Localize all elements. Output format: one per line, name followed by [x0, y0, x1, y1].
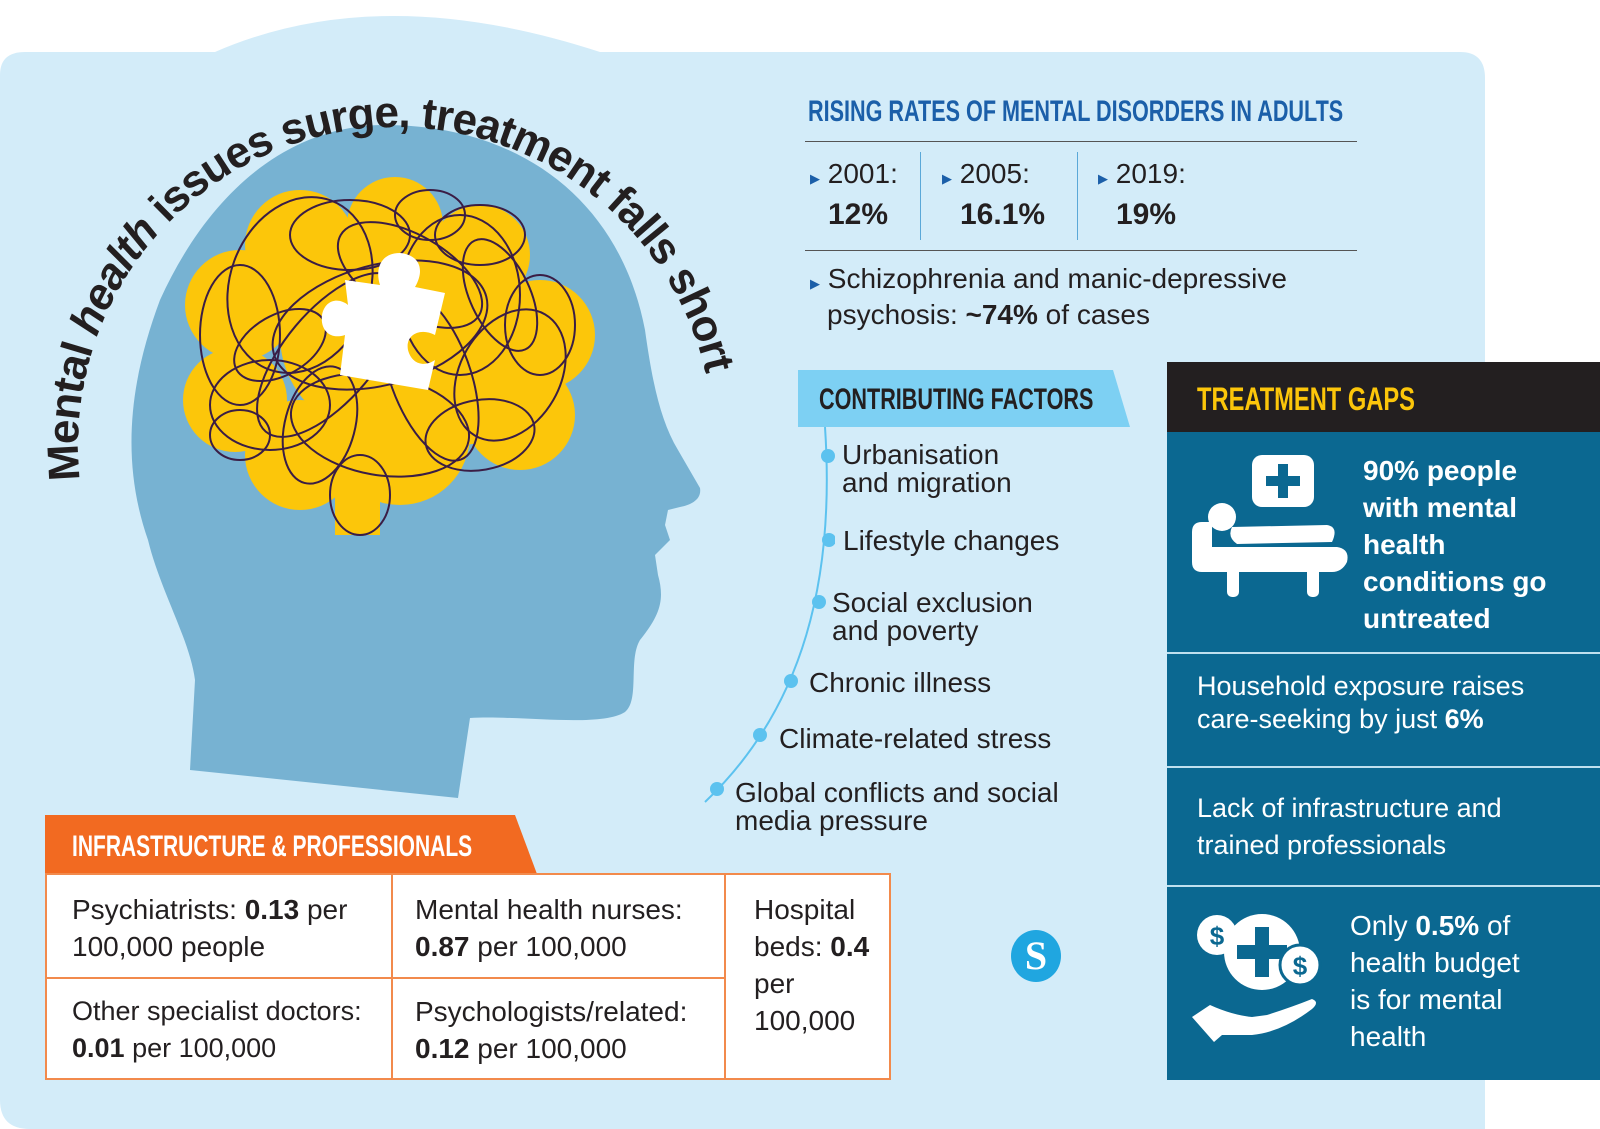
cell hospital beds: Hospital: [754, 894, 855, 925]
stat 2005: [942, 158, 1045, 231]
icon: money hand: [1192, 914, 1318, 1042]
factors list with curve: [704, 427, 1059, 836]
cell hospital beds: 100,000: [754, 1005, 855, 1036]
cell psychologists: Psychologists/related:: [415, 996, 687, 1027]
logo: [1011, 930, 1061, 982]
cell other doctors: [72, 996, 362, 1063]
text: budget: is for mental: [1350, 984, 1502, 1015]
contributing factors header: [798, 370, 1130, 427]
text: 90% untreated: [1362, 455, 1547, 634]
stat 2001: [810, 158, 898, 231]
text: budget: Only 0.5% of: [1350, 910, 1510, 941]
text: household exposure: [1197, 671, 1524, 734]
text: budget: health budget: [1350, 947, 1520, 978]
text: budget: [1350, 910, 1520, 1052]
factor 6: media pressure: [735, 805, 928, 836]
factor 1: Urbanisation: [842, 439, 999, 470]
stat 2001: 12%: [828, 198, 888, 231]
stat 2019: 19%: [1116, 198, 1176, 231]
schizophrenia note: [810, 263, 1287, 330]
factor 3: Social exclusion: [832, 587, 1033, 618]
text: 90% untreated: 90% people: [1363, 455, 1517, 486]
text: 90% untreated: with mental: [1363, 492, 1517, 523]
stats: rising rates: [805, 141, 1357, 251]
text: household exposure: care-seeking by just 6%: [1197, 704, 1484, 734]
factor 3: [832, 587, 1033, 646]
text: lack of infrastructure: trained professionals: [1197, 830, 1446, 860]
brain illustration: [183, 177, 595, 536]
text: 90% untreated: health: [1363, 529, 1445, 560]
cell nurses: [415, 894, 683, 962]
icon: money hand: $: [1210, 921, 1225, 951]
cell psychiatrists: [72, 894, 347, 962]
stat 2001: ▶ 2001:: [810, 158, 898, 189]
stat 2019: ▶ 2019:: [1098, 158, 1186, 189]
text: household exposure: Household exposure raises: [1197, 671, 1524, 701]
title: curved: Mental health issues surge, treatment falls short: [47, 100, 733, 479]
schizophrenia note: psychosis: ~74% of cases: [827, 299, 1150, 330]
cell hospital beds: beds: 0.4: [754, 931, 869, 962]
factor 3: and poverty: [832, 615, 978, 646]
cell hospital beds: per: [754, 968, 794, 999]
text: 90% untreated: untreated: [1363, 603, 1491, 634]
cell psychologists: [415, 996, 687, 1064]
infrastructure table: [45, 873, 891, 1080]
text: lack of infrastructure: Lack of infrastructure and: [1197, 793, 1502, 823]
contributing factors header: CONTRIBUTING FACTORS: [819, 383, 1093, 416]
factor 6: Global conflicts and social: [735, 777, 1059, 808]
schizophrenia note: ▶ Schizophrenia and manic-depressive: [810, 263, 1287, 294]
heading: rising rates: RISING RATES OF MENTAL DISORDERS IN ADULTS: [808, 95, 1343, 128]
factor 6: [735, 777, 1059, 836]
icon: money hand: $: [1293, 951, 1308, 981]
factor 4: Chronic illness: [809, 667, 991, 698]
cell hospital beds: [754, 894, 870, 1036]
stat 2005: 16.1%: [960, 198, 1045, 231]
stat 2005: ▶ 2005:: [942, 158, 1030, 189]
head silhouette: [132, 125, 700, 798]
puzzle piece: [322, 253, 445, 390]
factor 2: Lifestyle changes: [843, 525, 1059, 556]
stat 2019: [1098, 158, 1186, 231]
text: 90% untreated: conditions go: [1363, 566, 1547, 597]
header: [1167, 362, 1600, 432]
cell other doctors: Other specialist doctors:: [72, 996, 362, 1026]
header: TREATMENT GAPS: [1197, 381, 1415, 417]
cell psychiatrists: Psychiatrists: 0.13 per: [72, 894, 347, 925]
cell nurses: Mental health nurses:: [415, 894, 683, 925]
infrastructure header: INFRASTRUCTURE & PROFESSIONALS: [72, 830, 472, 863]
text: budget: health: [1350, 1021, 1426, 1052]
cell psychologists: 0.12 per 100,000: [415, 1033, 627, 1064]
factor 1: and migration: [842, 467, 1012, 498]
infrastructure header: [45, 815, 537, 873]
factor 1: [842, 439, 1012, 498]
factor 5: Climate-related stress: [779, 723, 1051, 754]
cell nurses: 0.87 per 100,000: [415, 931, 627, 962]
cell other doctors: 0.01 per 100,000: [72, 1033, 276, 1063]
logo: S: [1025, 933, 1047, 978]
text: lack of infrastructure: [1197, 793, 1502, 860]
cell psychiatrists: 100,000 people: [72, 931, 265, 962]
icon: hospital bed: [1192, 455, 1348, 597]
panel: treatment gaps: [1167, 362, 1600, 1080]
